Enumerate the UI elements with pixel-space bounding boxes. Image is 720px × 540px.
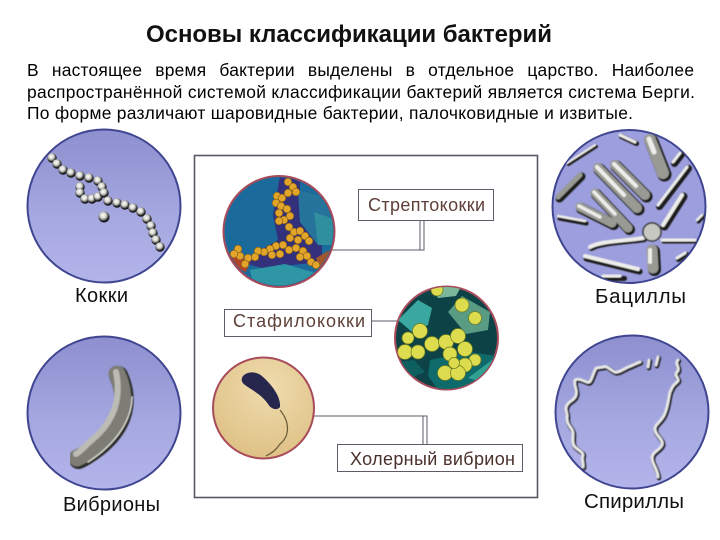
photo: streptococci: [224, 176, 336, 290]
connector: cholera vibrio: [314, 416, 427, 444]
icon: staphylococcus cells: [398, 284, 482, 380]
panel: spirilla: [556, 336, 708, 488]
label: streptococci: Стрептококки: [368, 195, 485, 215]
label: vibrios: Вибрионы: [63, 494, 160, 516]
label: streptococci: [358, 190, 494, 220]
intro text block: [27, 60, 695, 123]
panel: bacilli: [552, 130, 706, 283]
label: bacilli: Бациллы: [595, 285, 686, 308]
label: staphylococci: Стафилококки: [233, 311, 365, 331]
intro text block: По форме различают шаровидные бактерии, палочковидные и извитые.: [27, 103, 633, 123]
label: staphylococci: [224, 310, 372, 336]
icon: bacilli rods: [558, 135, 704, 278]
label: spirilla: Спириллы: [584, 490, 684, 513]
icon: cocci chain: [47, 153, 165, 252]
photo: staphylococci: [395, 284, 498, 392]
icon: vibrio cell: [76, 372, 132, 462]
icon: flagellum: [266, 410, 288, 456]
panel: cocci: [28, 130, 180, 282]
photo: cholera vibrio: [213, 358, 314, 458]
connector: staphylococci: [372, 320, 398, 322]
icon: coccus clusters: [230, 178, 320, 269]
label: cocci: Кокки: [75, 285, 128, 307]
label: cholera vibrio: [338, 444, 522, 472]
intro text block: распространённой системой классификации бактерий является система Берги.: [27, 82, 695, 102]
label: cholera vibrio: Холерный вибрион: [350, 449, 515, 469]
intro text block: В настоящее время бактерии выделены в отдельное царство. Наиболее: [27, 60, 694, 80]
panel: vibrios: [28, 336, 180, 490]
panel: central frame: [194, 156, 538, 498]
icon: vibrio body: [242, 372, 280, 409]
connector: streptococci: [332, 221, 424, 250]
icon: spirilla strands: [566, 357, 679, 478]
title: Основы классификации бактерий: [146, 21, 552, 48]
